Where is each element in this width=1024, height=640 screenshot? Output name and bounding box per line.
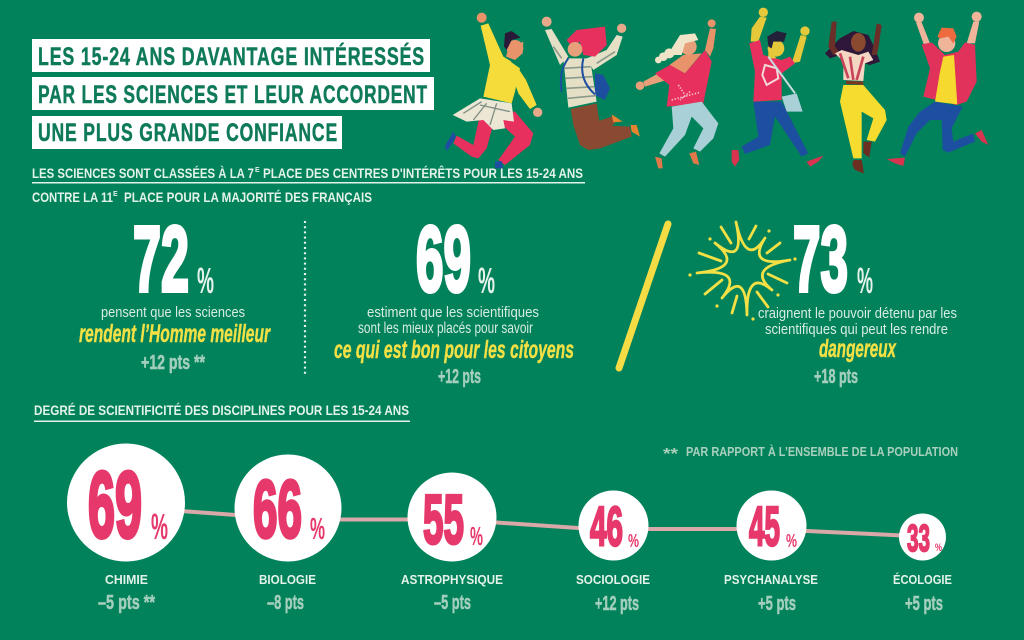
icon: burst [688,222,797,321]
subtitle: ranking of sciences: PLACE POUR LA MAJORITÉ DES FRANÇAIS [124,189,372,205]
stat: 69% [334,207,574,388]
stat: 69%: estiment que les scientifiques [367,305,539,321]
discipline: psychanalyse: PSYCHANALYSE [724,572,818,587]
section heading: disciplines: DEGRÉ DE SCIENTIFICITÉ DES DISCIPLINES POUR LES 15-24 ANS [34,402,409,418]
discipline: psychanalyse: 45 [749,494,780,558]
stat: 69%: % [478,260,495,301]
stat: 73%: +18 pts [814,366,858,388]
discipline: sociologie: +12 pts [595,593,639,615]
stat: 72%: +12 pts ** [141,352,205,374]
title [32,39,434,149]
discipline: astrophysique: 55 [423,480,464,558]
discipline: biologie: –8 pts [267,592,304,614]
discipline: biologie: % [310,511,325,546]
figure 3: pink top and pale jeans [636,19,718,168]
discipline: astrophysique [401,472,503,614]
discipline: astrophysique: ASTROPHYSIQUE [401,572,503,587]
subtitle: ranking of sciences [32,164,585,205]
stat: 73%: dangereux [819,335,897,363]
stat: 69%: sont les mieux placés pour savoir [358,320,533,337]
stat: 73%: scientifiques qui peut les rendre [765,322,948,338]
figure 1: yellow sweater [445,13,542,168]
stat: 72% [79,207,271,374]
stat: 73%: craignent le pouvoir détenu par les [758,306,957,322]
discipline: écologie: 33 [907,518,930,560]
subtitle: ranking of sciences: E [113,191,118,198]
discipline: astrophysique: –5 pts [434,592,471,614]
dotted divider [304,221,306,375]
discipline: sociologie: 46 [590,494,623,558]
discipline: biologie: BIOLOGIE [259,572,316,587]
discipline: sociologie: % [628,531,639,551]
discipline: biologie: 66 [253,464,302,555]
figure 6: red jacket [887,12,988,166]
discipline: chimie: % [151,506,168,547]
stat: 72%: rendent l’Homme meilleur [79,320,271,348]
discipline: écologie: ÉCOLOGIE [893,572,952,587]
stat: 72%: 72 [133,207,189,311]
subtitle: ranking of sciences: LES SCIENCES SONT CLASSÉES À LA 7 [32,165,254,181]
figure 2: striped top and pink hair [542,17,640,150]
title: UNE PLUS GRANDE CONFIANCE [38,119,338,147]
stat: 72%: % [197,260,214,301]
stat: 73%: 73 [793,207,848,311]
footnote: ** [663,446,679,463]
figure 4: pink shirt, blue jeans and bag [732,8,823,167]
discipline: biologie [234,454,342,614]
discipline: écologie: +5 pts [905,593,943,615]
discipline: psychanalyse: % [786,531,797,551]
discipline: chimie [67,444,185,614]
yellow slash [619,224,668,368]
discipline: écologie: % [935,542,942,554]
connecting line [126,507,923,536]
title: PAR LES SCIENCES ET LEUR ACCORDENT [38,81,428,109]
discipline: psychanalyse: +5 pts [758,593,796,615]
discipline: écologie [893,514,952,615]
discipline: sociologie: SOCIOLOGIE [576,572,650,587]
stat: 69%: +12 pts [438,366,481,388]
subtitle: ranking of sciences: E [255,167,260,174]
subtitle: ranking of sciences: PLACE DES CENTRES D'INTÉRÊTS POUR LES 15-24 ANS [263,164,583,181]
title: LES 15-24 ANS DAVANTAGE INTÉRESSÉS [38,42,425,71]
subtitle: ranking of sciences: CONTRE LA 11 [32,189,113,205]
discipline: chimie: –5 pts ** [98,592,155,614]
discipline: psychanalyse [724,490,818,615]
stat: 72%: pensent que les sciences [101,305,245,321]
illustration: jumping young people [445,8,988,173]
stat: 69%: 69 [416,207,471,311]
footnote [663,444,958,463]
discipline: astrophysique: % [470,521,483,551]
stat: 69%: ce qui est bon pour les citoyens [334,336,574,364]
figure 5: yellow trousers [825,22,887,173]
discipline: sociologie [576,490,650,615]
discipline: chimie: CHIMIE [105,572,148,587]
stat: 73%: % [857,260,873,301]
footnote: PAR RAPPORT À L’ENSEMBLE DE LA POPULATION [686,444,958,459]
discipline: chimie: 69 [88,452,142,557]
stat: 73% [758,207,957,388]
